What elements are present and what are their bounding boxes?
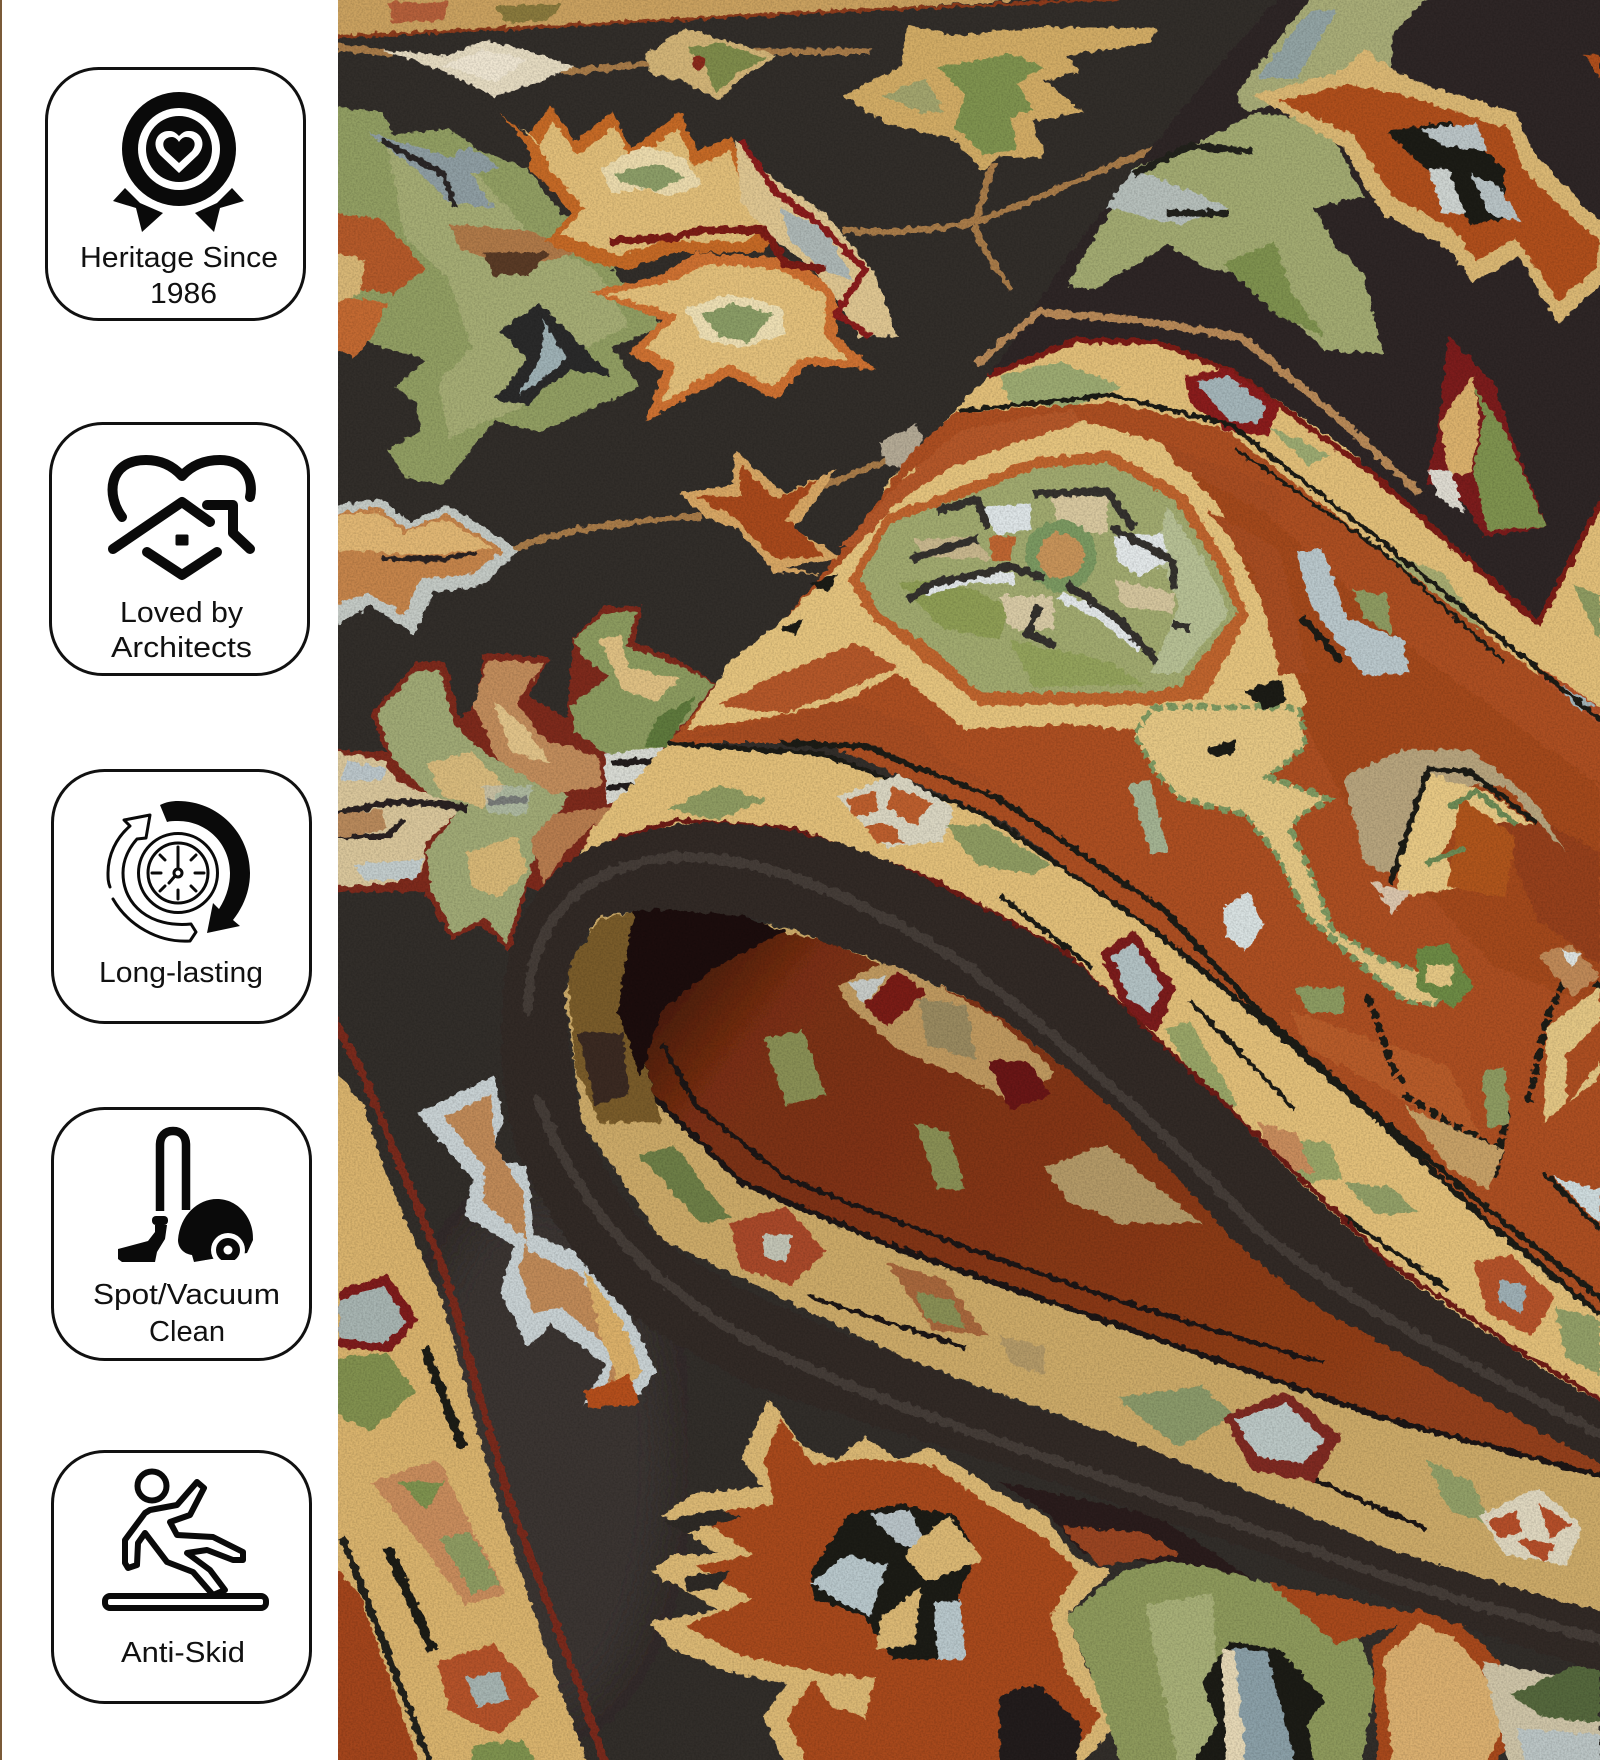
top border strip <box>332 0 1123 38</box>
black stars <box>780 575 1286 756</box>
red field line with V <box>988 340 1600 623</box>
grey-blue glyph lower <box>494 303 612 406</box>
left edge sliver of photo <box>0 0 3 1760</box>
outer border line work <box>668 743 1600 1319</box>
badge: spot or vacuum clean <box>52 1108 310 1360</box>
orange star motif <box>679 424 923 575</box>
rug charcoal field <box>332 0 1600 1760</box>
stems upper <box>337 47 1159 550</box>
roll: upper gold border <box>865 342 1600 786</box>
grey-blue motif right of medallion <box>1297 550 1409 676</box>
knotted pile grain overlay <box>338 0 1600 1760</box>
left large flower: green mass <box>332 107 662 485</box>
medallion beige petals <box>1051 496 1107 533</box>
label line two: Clean <box>149 1316 225 1348</box>
icon: vacuum cleaner <box>118 1131 253 1267</box>
label line two: Architects <box>111 632 252 664</box>
white sidebar panel <box>2 0 338 1760</box>
roll: orange flower <box>1252 51 1600 323</box>
white flower top <box>382 40 575 97</box>
underside rust pattern <box>764 960 1201 1223</box>
gold halo around medallion <box>687 410 1308 799</box>
dark interior shadow at fold opening <box>567 909 786 1122</box>
outer border motifs <box>668 774 1600 1375</box>
tan diamond motif <box>1344 750 1566 915</box>
binding highlights <box>528 857 1600 1641</box>
icon: rosette with heart <box>113 92 244 232</box>
roll: tan stripe and bud <box>977 312 1547 537</box>
left peach flower <box>332 499 519 634</box>
underside: gold band <box>565 909 1600 1616</box>
underside: rust field <box>612 915 1600 1477</box>
icon: clock with circular arrows <box>108 801 250 941</box>
roll: upper green leaves <box>1067 0 1432 354</box>
badge: heritage since 1986 <box>46 68 304 320</box>
icon: house in heart <box>113 460 251 575</box>
border flowers upper <box>999 361 1600 741</box>
medallion center ring <box>1032 526 1090 585</box>
green medallion <box>848 451 1249 705</box>
left border of field <box>332 1016 606 1760</box>
binding edge <box>501 823 1600 1672</box>
small white blooms in rust <box>1224 892 1600 1229</box>
label: Heritage Since <box>80 242 278 274</box>
gold flower upper <box>500 107 786 269</box>
label year: 1986 <box>150 278 217 310</box>
leaf motif upper right <box>842 25 1156 171</box>
badge: long-lasting <box>52 770 310 1022</box>
photo: rolled hand-knotted rug <box>332 0 1600 1760</box>
badge: anti-skid <box>52 1452 310 1702</box>
underside gold band motifs <box>640 1145 1583 1566</box>
roll: rust main field <box>668 402 1600 1319</box>
medallion white blooms <box>984 503 1031 537</box>
bottom green medallion <box>999 1482 1426 1760</box>
white-edged sawtooth leaf <box>418 1075 657 1409</box>
label: Long-lasting <box>99 957 263 989</box>
lattice black dotted lines <box>1368 965 1600 1179</box>
badge: loved by architects <box>50 424 308 674</box>
grey-blue glyph <box>368 132 500 208</box>
lighter worn field patch <box>415 1201 662 1717</box>
rust tone variation <box>1168 449 1600 1167</box>
label: Anti-Skid <box>121 1637 245 1669</box>
gold flower lower <box>589 253 876 421</box>
black inner lines <box>780 395 1600 1302</box>
underside black lines <box>629 1016 1600 1529</box>
bottom orange star <box>649 1397 1123 1760</box>
rust band arcs over halo <box>840 410 1080 547</box>
red line along binding <box>612 820 1600 1403</box>
icon: slipping figure on floor <box>105 1472 266 1608</box>
medallion black line work <box>907 492 1190 662</box>
gold scroll with green outline <box>1128 707 1473 1014</box>
label: Spot/Vacuum <box>93 1279 280 1311</box>
lower-left flower with red outline <box>332 606 719 952</box>
roll: outer gold border <box>565 743 1600 1407</box>
red lattice motif <box>610 140 898 337</box>
bottom right peach flower <box>1372 1607 1600 1760</box>
green bud top <box>646 28 777 101</box>
label: Loved by <box>120 597 244 629</box>
rolled rug: back field on top of roll <box>988 0 1600 623</box>
